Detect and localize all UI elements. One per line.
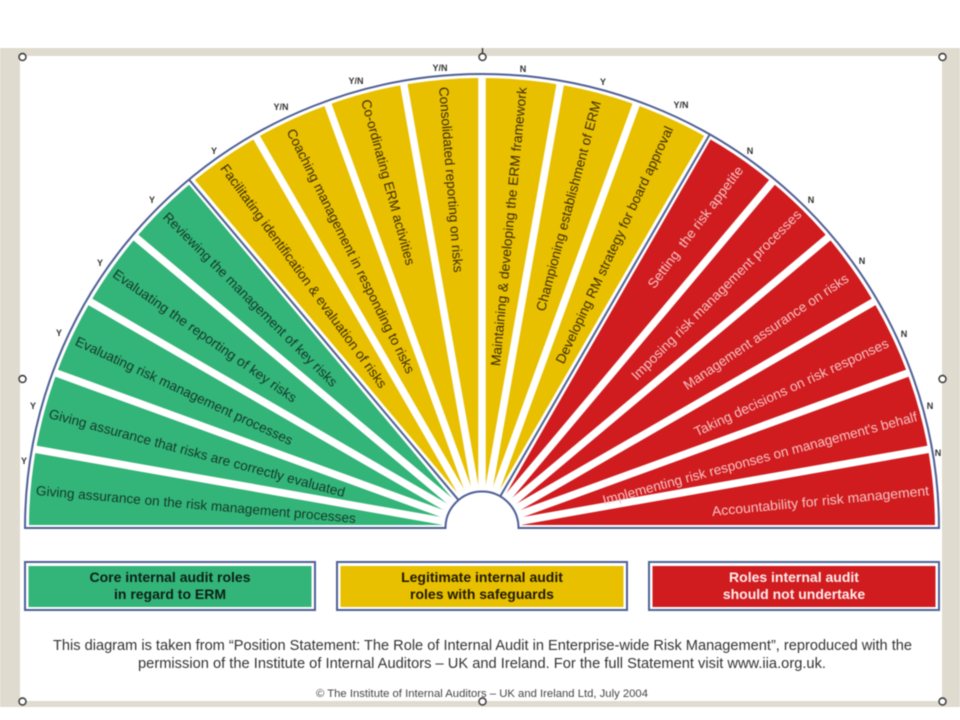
outline: semicircle with hub <box>25 74 939 528</box>
labels: legitimate roles with safeguards: Maintaining & developing the ERM framework <box>488 86 530 367</box>
labels: roles internal audit should not undertake: Taking decisions on risk responses <box>692 336 891 439</box>
legend: legitimate roles with safeguards <box>337 562 627 610</box>
labels: roles internal audit should not undertake: Imposing risk management processes <box>628 207 805 383</box>
markers: Y and N ratings around the arc: Y <box>211 146 217 156</box>
legend: core internal audit roles: in regard to ERM <box>114 586 226 602</box>
markers: Y and N ratings around the arc: N <box>747 146 753 156</box>
markers: Y and N ratings around the arc: N <box>808 195 814 205</box>
legend: legitimate roles with safeguards: roles with safeguards <box>410 586 554 602</box>
markers: Y and N ratings around the arc: Y/N <box>673 100 689 110</box>
labels: legitimate roles with safeguards: Facilitating identification & evaluation of risks <box>217 161 390 391</box>
markers: Y and N ratings around the arc: N <box>520 64 526 74</box>
markers: Y and N ratings around the arc: Y/N <box>432 63 448 73</box>
legend: core internal audit roles <box>25 562 315 610</box>
markers: Y and N ratings around the arc: N <box>927 401 933 411</box>
labels: legitimate roles with safeguards <box>217 86 676 391</box>
labels: roles internal audit should not undertake <box>601 163 930 519</box>
markers: Y and N ratings around the arc: Y <box>600 77 606 87</box>
markers: Y and N ratings around the arc: N <box>901 329 907 339</box>
chart: semicircular role diagram <box>20 63 942 568</box>
legend: roles not to undertake <box>649 562 939 610</box>
markers: Y and N ratings around the arc: N <box>935 448 941 458</box>
labels: legitimate roles with safeguards: Developing RM strategy for board approval <box>553 124 676 366</box>
markers: Y and N ratings around the arc <box>21 63 941 466</box>
labels: core internal audit roles: Giving assurance on the risk management processes <box>35 483 357 526</box>
legend: core internal audit roles: Core internal audit roles <box>89 569 251 585</box>
legend: legitimate roles with safeguards: Legitimate internal audit <box>401 569 563 585</box>
labels: core internal audit roles: Reviewing the management of key risks <box>160 209 341 390</box>
labels: core internal audit roles: Giving assurance that risks are correctly evaluated <box>47 406 347 500</box>
caption: source statement <box>53 638 912 672</box>
caption: source statement: This diagram is taken from “Position Statement: The Role of Internal Audit in Enterprise-wide Risk Management”, reproduced with the <box>53 638 912 654</box>
labels: core internal audit roles <box>35 209 357 526</box>
markers: Y and N ratings around the arc: Y <box>56 328 62 338</box>
markers: Y and N ratings around the arc: Y <box>30 401 36 411</box>
markers: Y and N ratings around the arc: Y/N <box>273 102 289 112</box>
markers: Y and N ratings around the arc: Y/N <box>348 76 364 86</box>
markers: Y and N ratings around the arc: N <box>859 256 865 266</box>
labels: roles internal audit should not undertake: Accountability for risk management <box>711 483 930 519</box>
legend: roles not to undertake: should not undertake <box>723 586 865 602</box>
caption: source statement: permission of the Institute of Internal Auditors – UK and Ireland. For the full Statement visit www.iia.org.uk. <box>138 656 826 672</box>
labels: legitimate roles with safeguards: Consolidated reporting on risks <box>436 86 466 273</box>
wedge: forbidden roles red area <box>482 138 935 528</box>
copyright line: © The Institute of Internal Auditors – UK and Ireland Ltd, July 2004 <box>316 688 648 700</box>
labels: roles internal audit should not undertake: Management assurance on risks <box>681 271 852 393</box>
markers: Y and N ratings around the arc: Y <box>21 456 27 466</box>
labels: core internal audit roles: Evaluating risk management processes <box>73 334 295 448</box>
labels: legitimate roles with safeguards: Co-ordinating ERM activities <box>358 98 418 267</box>
labels: legitimate roles with safeguards: Coaching management in responding to risks <box>284 126 418 376</box>
labels: roles internal audit should not undertake: Implementing risk responses on management's behalf <box>601 409 919 508</box>
labels: roles internal audit should not undertake: Setting the risk appetite <box>645 163 746 291</box>
legend: roles not to undertake: Roles internal audit <box>729 569 859 585</box>
markers: Y and N ratings around the arc: Y <box>97 258 103 268</box>
labels: core internal audit roles: Evaluating the reporting of key risks <box>110 266 300 406</box>
wedge: legitimate roles yellow area <box>191 78 709 528</box>
labels: legitimate roles with safeguards: Championing establishment of ERM <box>533 99 604 313</box>
markers: Y and N ratings around the arc: Y <box>149 195 155 205</box>
wedge: core roles green area <box>29 183 482 528</box>
